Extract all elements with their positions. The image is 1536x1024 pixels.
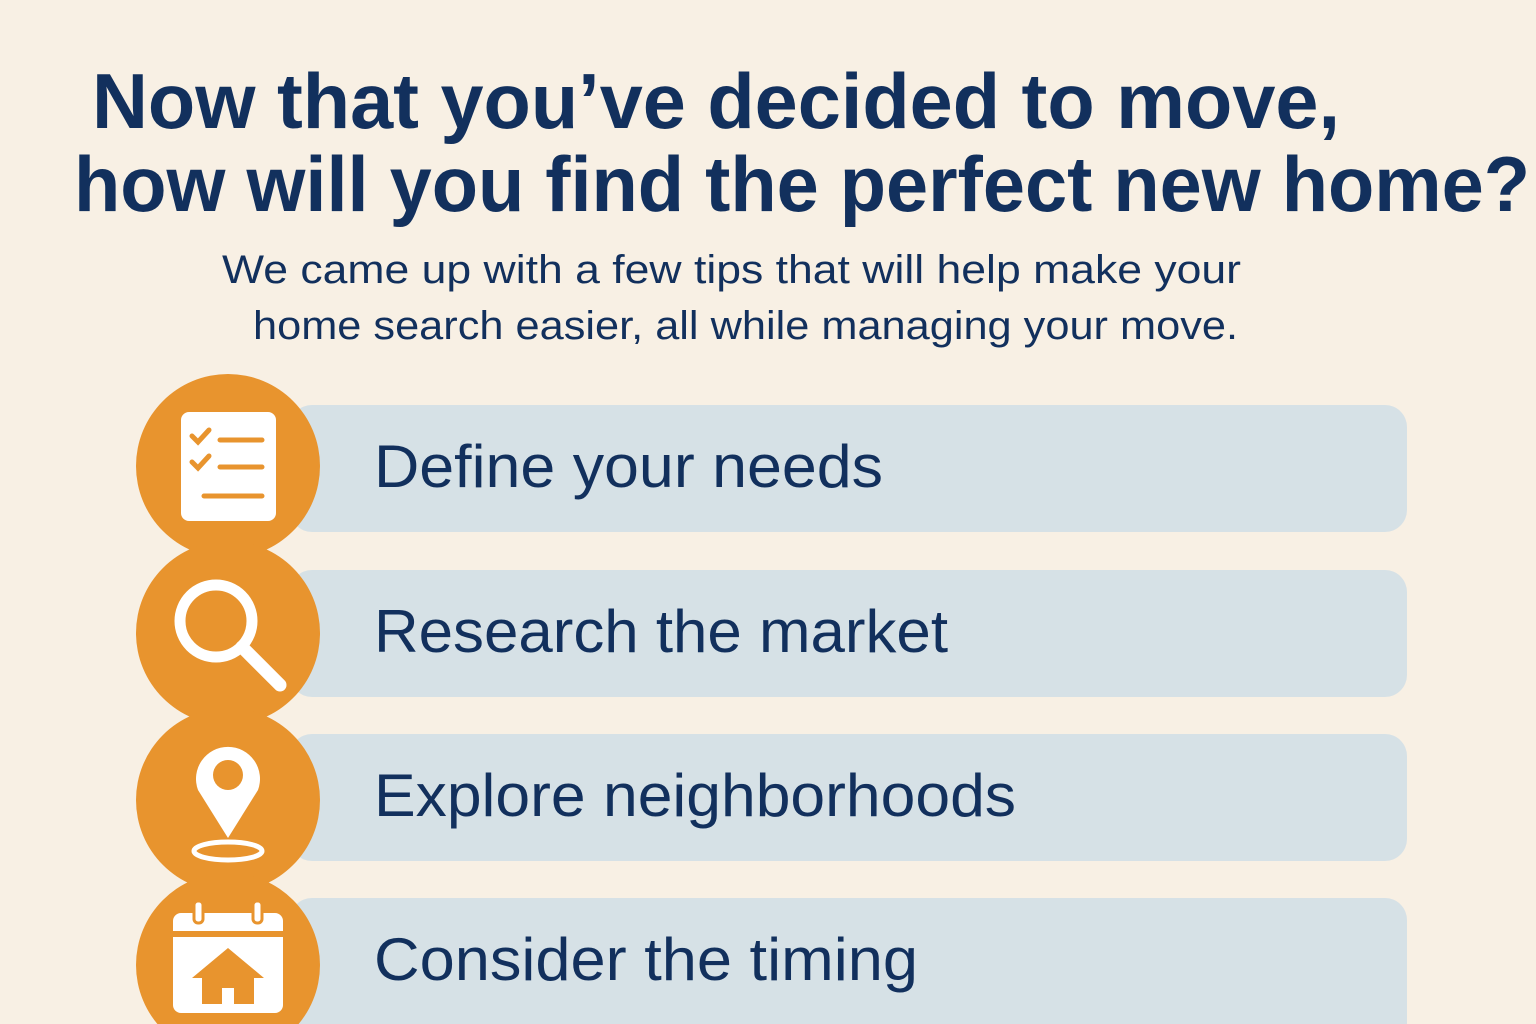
icon: magnifier bbox=[136, 541, 320, 725]
subtitle bbox=[222, 248, 1241, 348]
tip labels: Research the market bbox=[374, 598, 948, 665]
icon: calendar house bbox=[136, 873, 320, 1024]
tip labels bbox=[374, 433, 1016, 993]
subtitle: home search easier, all while managing your move. bbox=[253, 304, 1238, 348]
tip labels: Explore neighborhoods bbox=[374, 762, 1016, 829]
icon: location pin bbox=[136, 708, 320, 892]
tip labels: Consider the timing bbox=[374, 926, 918, 993]
icon: checklist bbox=[136, 374, 320, 558]
title: Now that you’ve decided to move, bbox=[92, 57, 1340, 145]
tip 3 bar bbox=[290, 734, 1407, 861]
tip 4 bar bbox=[290, 898, 1407, 1024]
title: how will you find the perfect new home? bbox=[74, 140, 1530, 228]
title bbox=[74, 57, 1530, 228]
tip 2 bar bbox=[290, 570, 1407, 697]
tip 1 bar bbox=[290, 405, 1407, 532]
subtitle: We came up with a few tips that will help make your bbox=[222, 248, 1241, 292]
tip labels: Define your needs bbox=[374, 433, 883, 500]
